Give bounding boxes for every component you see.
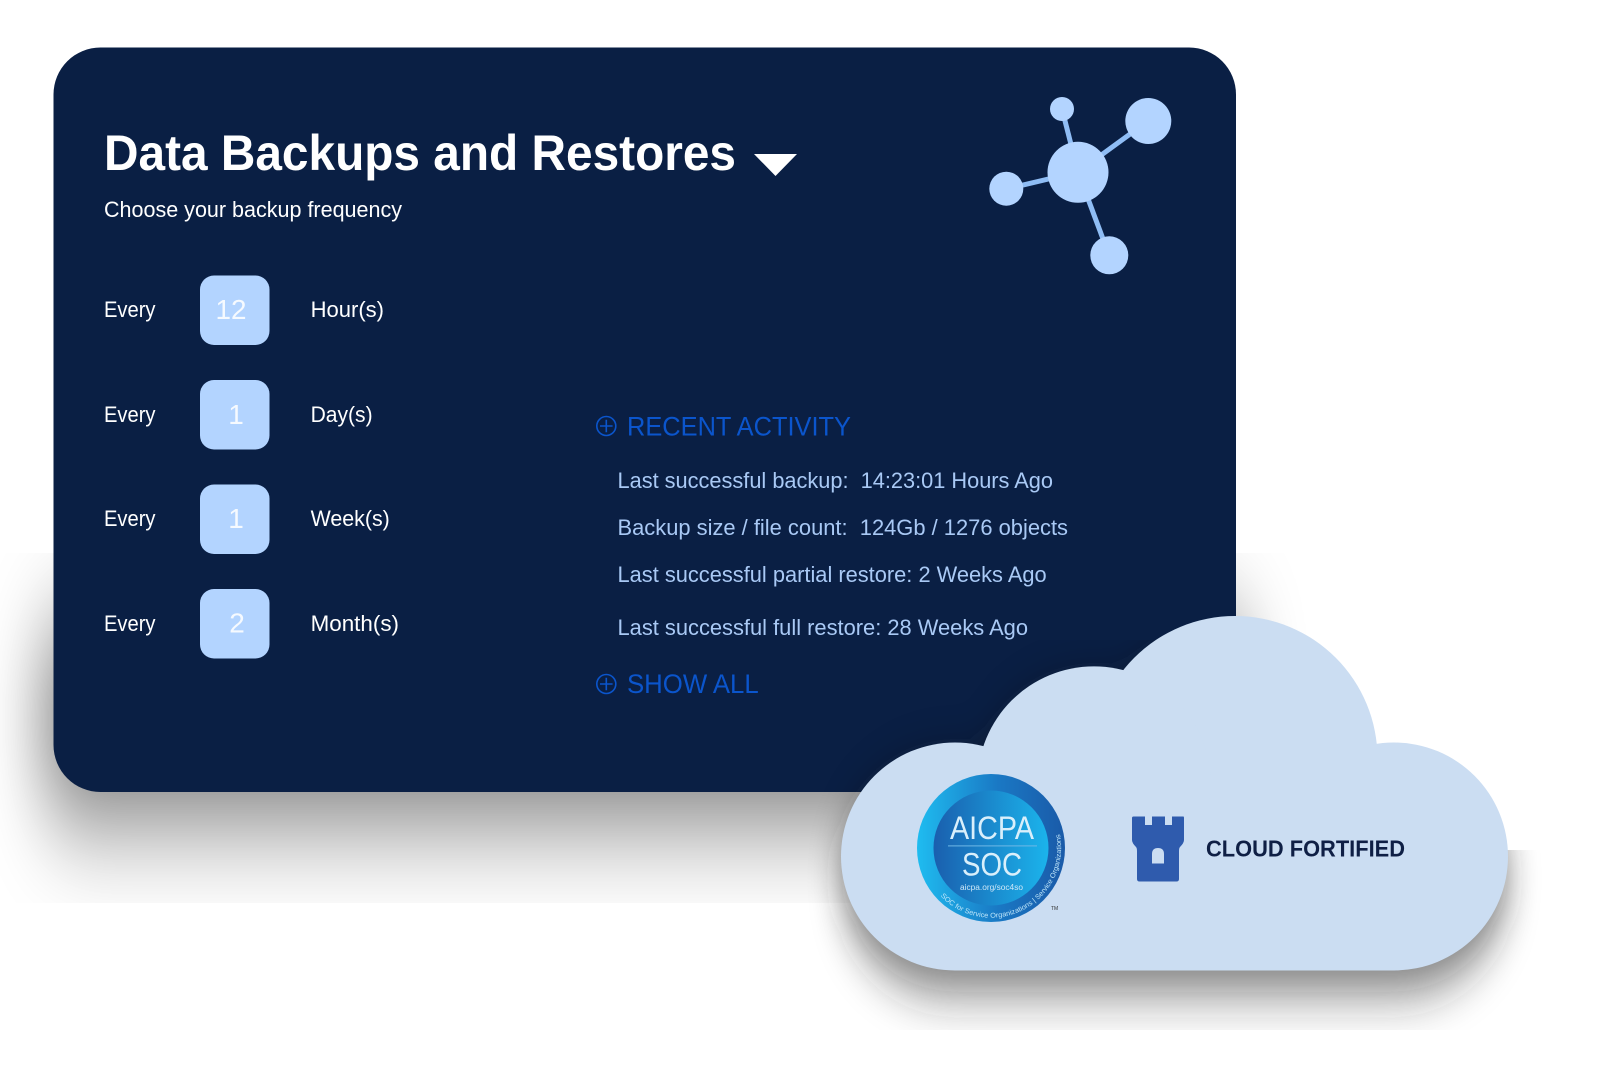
row: every 2 months: 2	[229, 608, 245, 639]
cloud shadow	[820, 741, 1530, 1030]
row: every 12 hours: Every	[104, 297, 156, 322]
panel: data backups	[54, 48, 1236, 792]
activity list: Last successful full restore: 28 Weeks Ago	[618, 615, 1028, 640]
row: every 1 day	[104, 380, 373, 450]
icon: dropdown arrow	[754, 154, 797, 176]
row: every 1 day: Day(s)	[311, 402, 373, 427]
icon: network nodes	[989, 97, 1171, 274]
row: every 1 week	[104, 484, 390, 554]
subtitle: Choose your backup frequency	[104, 197, 402, 222]
label: cloud fortified: CLOUD FORTIFIED	[1206, 836, 1405, 862]
row: every 2 months: Every	[104, 611, 156, 636]
activity list	[618, 468, 1068, 640]
heading: recent activity: RECENT ACTIVITY	[627, 412, 851, 442]
row: every 1 week: Week(s)	[311, 506, 390, 531]
badge: AICPA SOC: SOC	[962, 846, 1022, 882]
row: every 1 day: Every	[104, 402, 156, 427]
badge: AICPA SOC: AICPA	[950, 810, 1035, 846]
row: every 1 week: Every	[104, 506, 156, 531]
link: show all: SHOW ALL	[627, 669, 759, 699]
badge: AICPA SOC: aicpa.org/soc4so	[960, 883, 1024, 892]
badge: AICPA SOC: TM	[1051, 906, 1058, 912]
row: every 1 week: 1	[228, 503, 244, 534]
row: every 12 hours	[104, 276, 384, 345]
badge: AICPA SOC	[917, 774, 1065, 922]
row: every 1 day: 1	[228, 399, 244, 430]
icon: castle tower	[1132, 816, 1184, 882]
panel shadow	[44, 620, 1246, 820]
row: every 12 hours: Hour(s)	[311, 297, 384, 322]
row: every 2 months	[104, 589, 399, 658]
row: every 2 months: Month(s)	[311, 611, 399, 636]
activity list: Backup size / file count: 124Gb / 1276 objects	[618, 515, 1068, 540]
activity list: Last successful backup: 14:23:01 Hours Ago	[618, 468, 1053, 493]
row: every 12 hours: 12	[216, 294, 246, 325]
activity list: Last successful partial restore: 2 Weeks Ago	[618, 562, 1047, 587]
badge: AICPA SOC: SOC for Service Organizations | Service Organizations	[941, 834, 1062, 919]
cloud	[841, 616, 1508, 970]
title: Data Backups and Restores	[104, 125, 736, 181]
